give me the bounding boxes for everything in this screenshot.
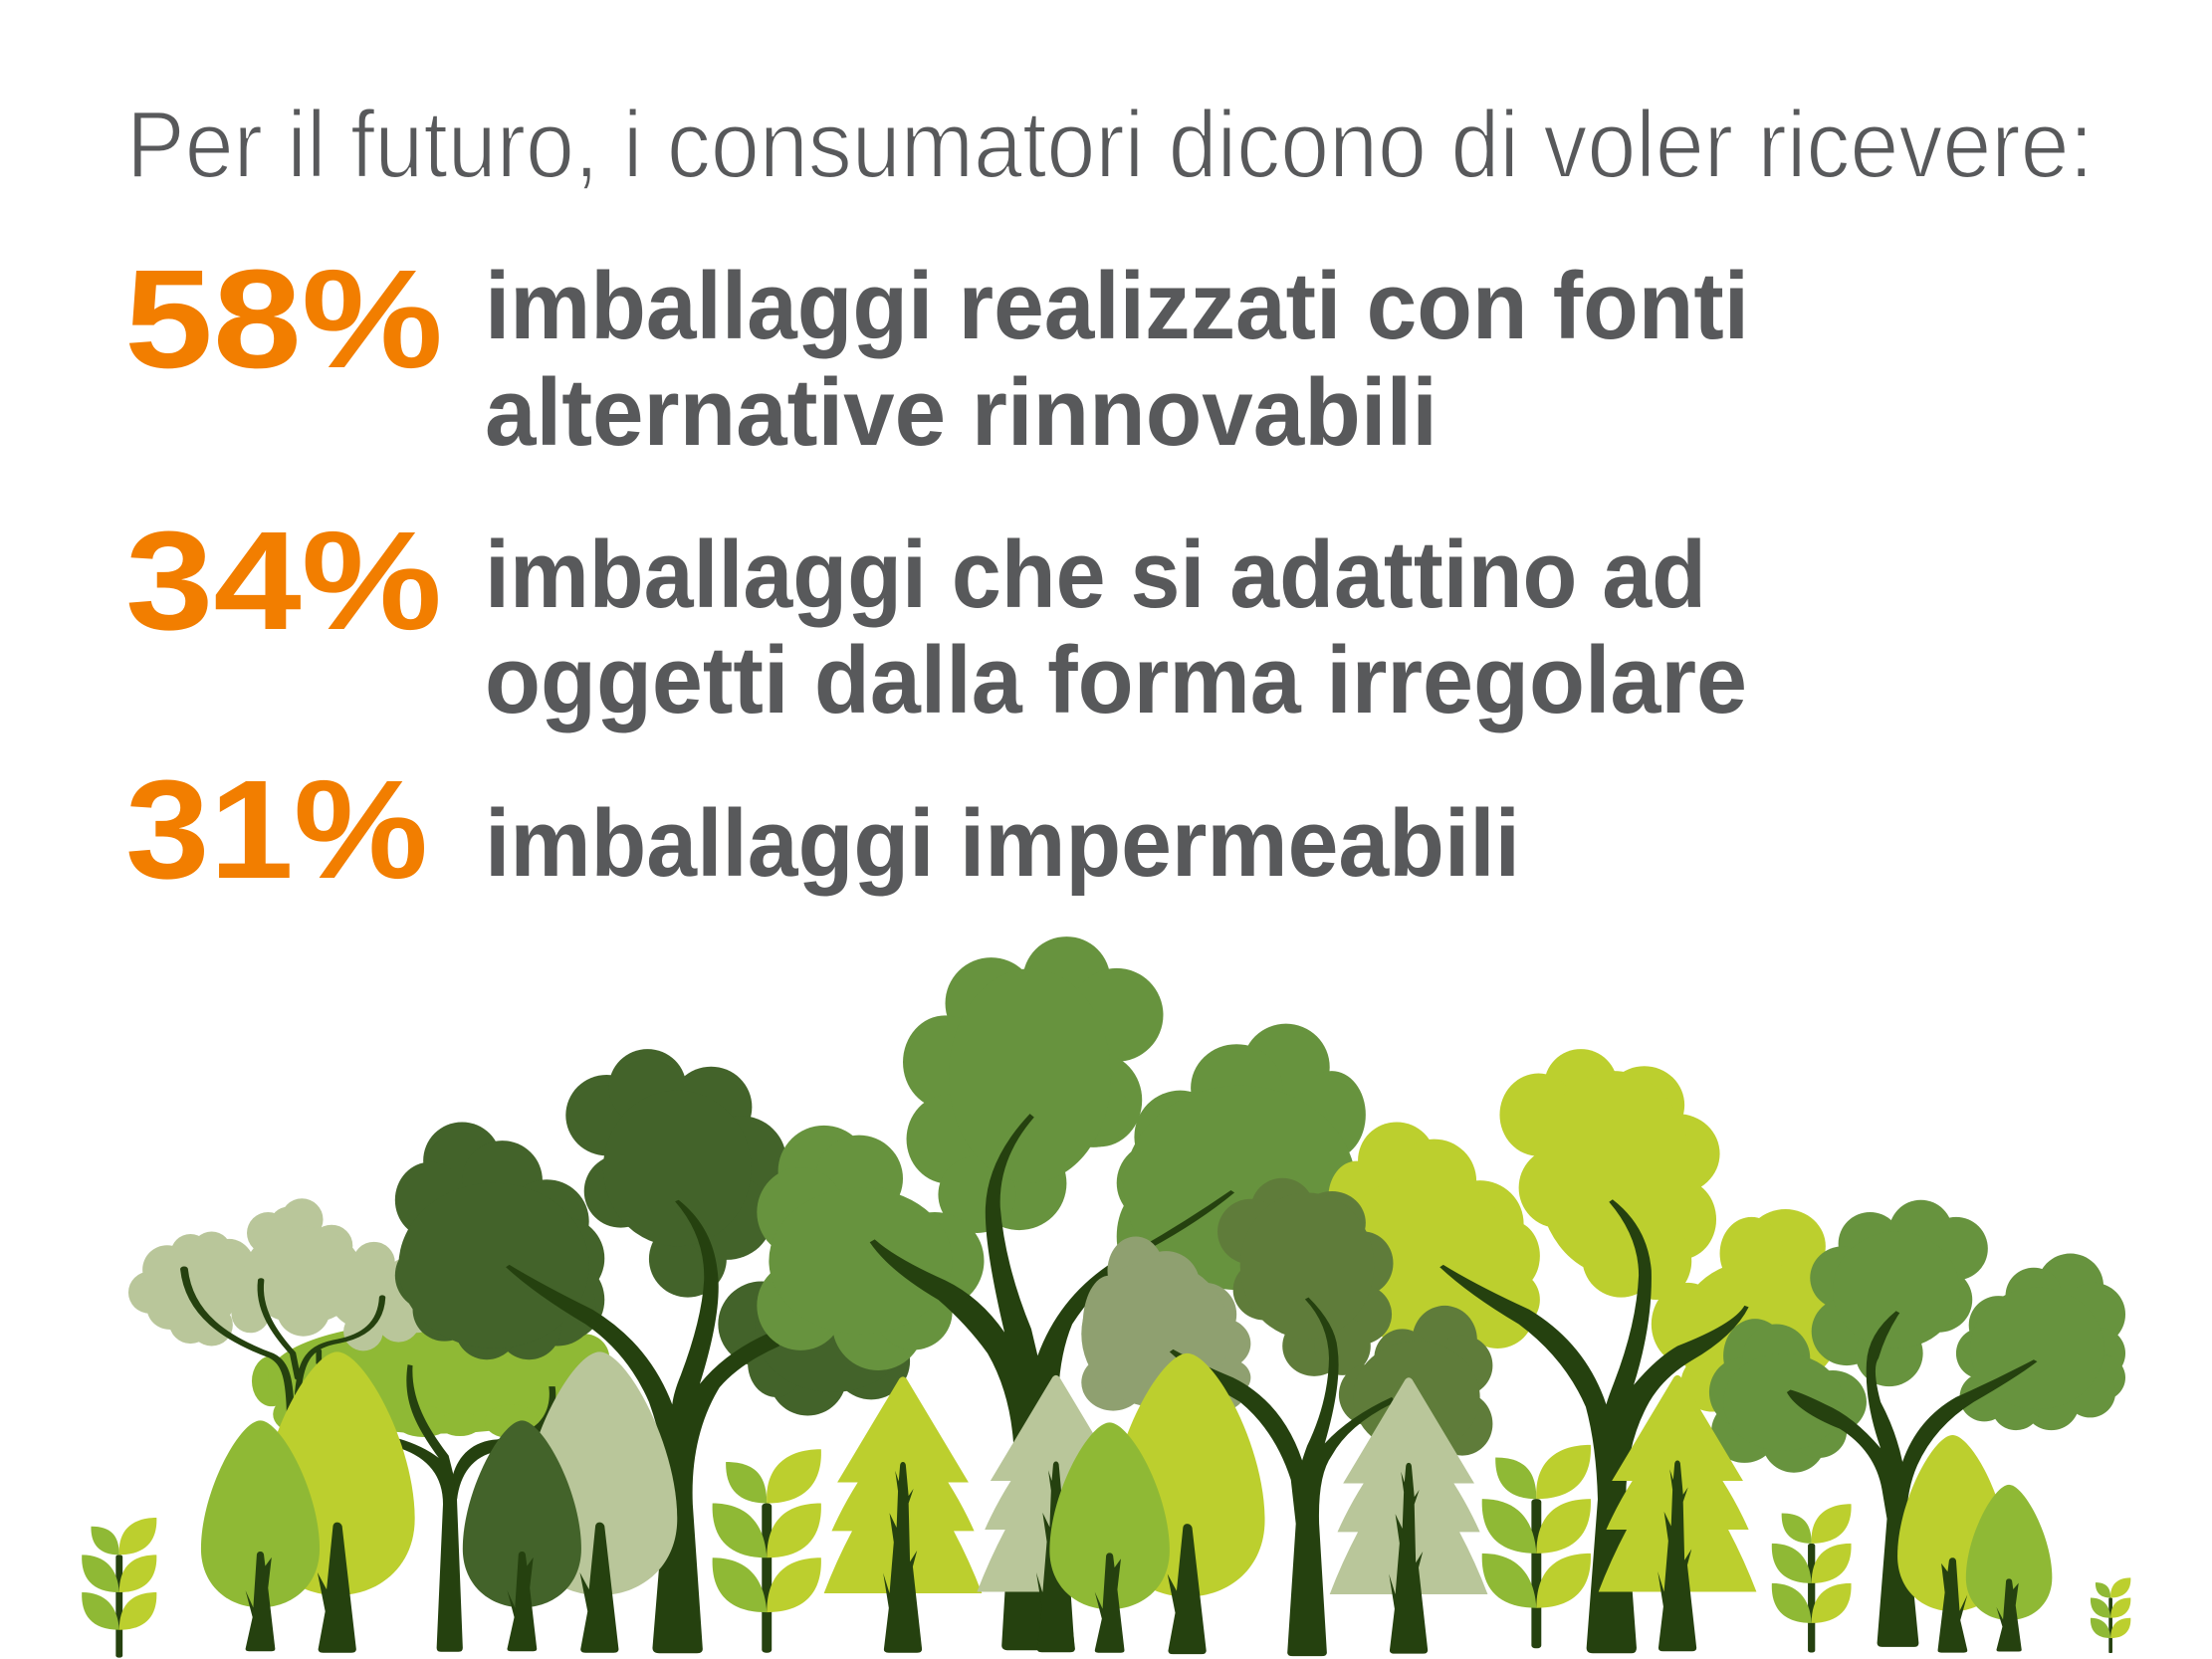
description 34%: oggetti dalla forma irregolare [485, 627, 1747, 733]
tree trunk: large centre [870, 1114, 1234, 1650]
pine: lime right [1599, 1375, 1756, 1651]
description 34%: imballaggi che si adattino ad [485, 521, 1706, 628]
stat: 34% [125, 502, 1747, 733]
sprout 3 [1482, 1445, 1591, 1648]
tree: light green teardrop 2 [1049, 1422, 1170, 1653]
tree: dark teardrop [463, 1420, 581, 1651]
tree canopy: lime top-right [1499, 1049, 1720, 1300]
tree trunk: behind light green bush [398, 1364, 555, 1652]
stat: 58% [124, 240, 1749, 466]
tree canopy: medium green right-centre [1117, 1024, 1366, 1290]
description 58%: alternative rinnovabili [485, 359, 1438, 466]
title: Per il futuro, i consumatori dicono di voler ricevere: [126, 92, 2094, 198]
tree canopy: muted sage centre [1081, 1236, 1250, 1412]
tree canopy: medium green small lower-right [1709, 1319, 1867, 1473]
sprout 4 [1772, 1504, 1852, 1653]
tree: sage teardrop [522, 1351, 677, 1653]
tree canopy: medium green far-right upper [1810, 1200, 1988, 1386]
percentage 34%: 34% [125, 502, 442, 659]
tree canopy: medium green left-centre [757, 1126, 984, 1370]
tree canopy: lime centre-right [1328, 1122, 1540, 1348]
sprout 5 [2091, 1577, 2130, 1653]
tree trunk: far right [1787, 1311, 2037, 1647]
tree: lime teardrop 1 [260, 1351, 415, 1653]
description 58%: imballaggi realizzati con fonti [485, 253, 1749, 359]
tree: light green teardrop 3 [1966, 1485, 2052, 1652]
description 31%: imballaggi impermeabili [485, 790, 1520, 897]
pine: lime left [824, 1376, 982, 1653]
pine: sage left [977, 1375, 1135, 1652]
tree trunk: centre-right [1170, 1298, 1396, 1656]
percentage 31%: 31% [125, 750, 428, 908]
tree trunk: right with lime canopies [1439, 1199, 1749, 1653]
percentage 58%: 58% [124, 240, 443, 397]
tree canopy: medium green top-centre [903, 936, 1163, 1233]
tree canopy: dark green centre-left [565, 1049, 910, 1415]
tree canopy: olive lower [1339, 1306, 1492, 1456]
stat: 31% [125, 750, 1520, 908]
tree: lime teardrop 3 [1897, 1435, 2008, 1653]
forest illustration [82, 936, 2130, 1658]
tree canopy: dark green left [395, 1122, 604, 1359]
tree trunk: large left [506, 1200, 779, 1653]
trunk: sage tree branches [184, 1269, 382, 1426]
tree canopy: lime lower-right [1652, 1209, 1840, 1412]
tree canopy: pale sage left [128, 1198, 437, 1350]
tree canopy: olive centre-right [1217, 1178, 1393, 1376]
tree: light green teardrop 1 [201, 1420, 320, 1651]
pine: sage right [1330, 1377, 1487, 1654]
tree canopy: medium green far-right lower [1956, 1254, 2125, 1430]
sprout 1 [82, 1518, 156, 1658]
tree canopy: light green bush [252, 1322, 609, 1438]
tree: lime teardrop 2 [1110, 1353, 1265, 1654]
sprout 2 [713, 1449, 821, 1653]
